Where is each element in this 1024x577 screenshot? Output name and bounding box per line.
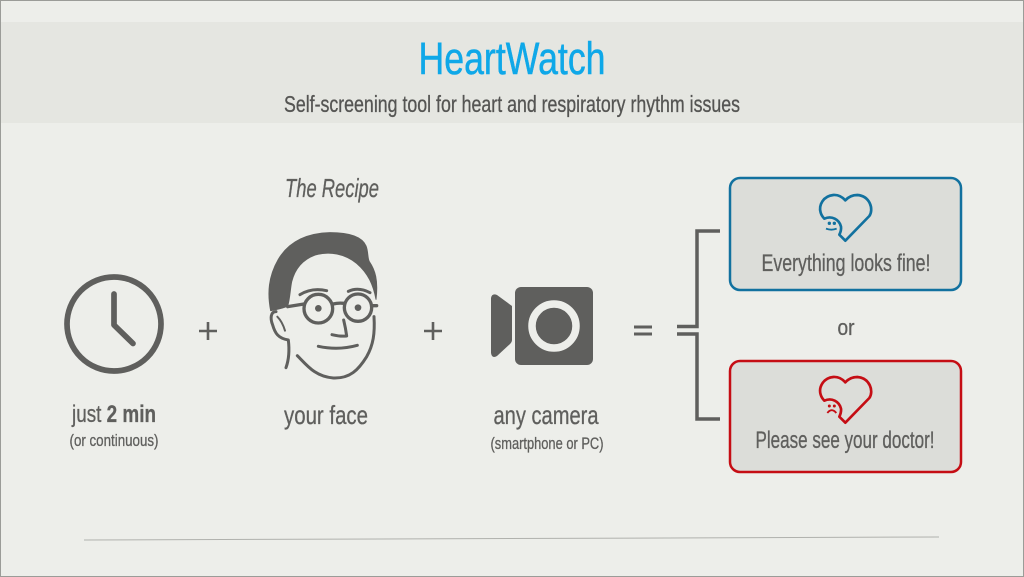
label: just 2 min: just 2 min	[71, 401, 156, 428]
header band	[1, 22, 1023, 123]
label: smartphone or PC: (smartphone or PC)	[490, 434, 604, 453]
glasses	[304, 294, 333, 323]
label: any camera: any camera	[494, 400, 599, 430]
plus sign	[424, 322, 442, 340]
label: just 2 min	[70, 401, 158, 450]
title: HeartWatch	[418, 33, 606, 84]
label: your face: your face	[284, 400, 368, 430]
icon: face	[269, 233, 377, 378]
hair	[269, 233, 377, 311]
footer rule	[84, 537, 939, 540]
subtitle: Self-screening tool for heart and respiratory rhythm issues	[284, 91, 740, 117]
recipe heading: The Recipe	[285, 173, 379, 203]
icon: sad heart	[820, 377, 871, 423]
jaw	[297, 317, 374, 378]
eyebrows	[300, 289, 370, 295]
label: or continuous: (or continuous)	[70, 431, 158, 450]
label: or: or	[838, 315, 854, 340]
panel: everything looks fine	[730, 178, 961, 290]
bracket	[677, 231, 720, 419]
plus sign	[199, 322, 217, 340]
eyes	[315, 305, 322, 312]
nose	[332, 320, 347, 336]
equals sign	[634, 327, 652, 334]
ear	[271, 312, 289, 368]
label: any camera	[490, 400, 604, 453]
icon: clock	[67, 277, 161, 371]
icon: smiling heart	[820, 195, 871, 241]
result text: Please see your doctor!	[756, 427, 934, 454]
panel: please see your doctor	[730, 361, 961, 472]
mouth	[318, 345, 357, 348]
result text: Everything looks fine!	[762, 250, 930, 277]
icon: camera	[491, 287, 593, 365]
